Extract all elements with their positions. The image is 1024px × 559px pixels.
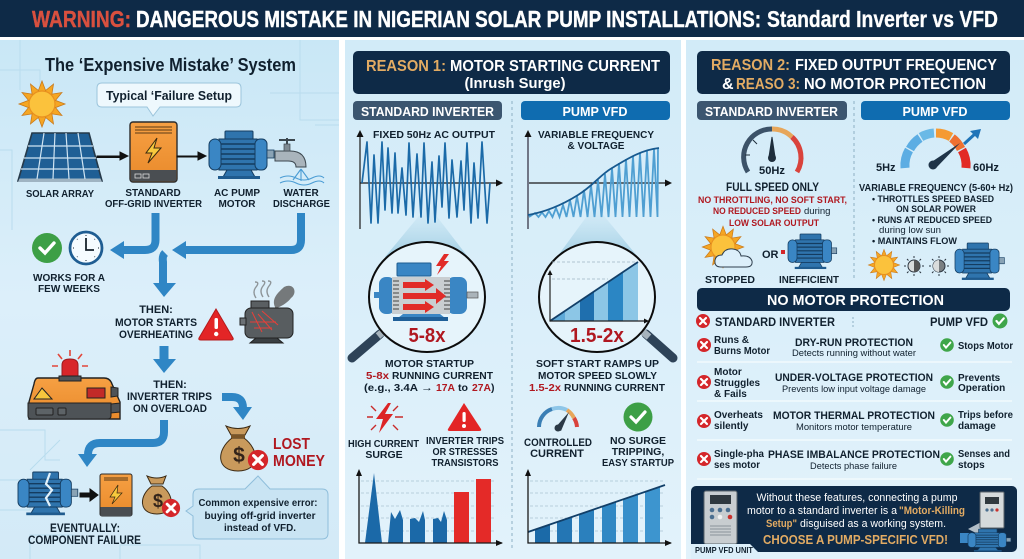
icon: clock [70, 232, 102, 264]
icon: no surge check [624, 402, 652, 432]
chart: standard inverter surge bars [356, 469, 503, 546]
label: 60Hz: 60Hz [973, 162, 999, 174]
text: full speed only: NO REDUCED SPEED [713, 206, 801, 217]
label: no surge tripping: NO SURGE [610, 435, 666, 447]
icon: red warning triangle [199, 309, 233, 340]
row: phase imbalance protection: Detects phase failure [810, 461, 897, 472]
chart: variable frequency waveform [524, 129, 672, 229]
table header: pump vfd: PUMP VFD [930, 317, 988, 329]
text: variable frequency benefits: during low sun [879, 225, 941, 236]
label: inverter trips on overload [127, 379, 212, 415]
icon: broken motor [18, 472, 78, 515]
callout: common expensive error: instead of VFD. [224, 522, 296, 534]
icon: money bag with loss mark [221, 426, 268, 471]
row: under-voltage protection [697, 367, 1005, 400]
callout: common expensive error: Common expensive error: [198, 497, 318, 509]
text: motor killing setup warning: CHOOSE A PUMP-SPECIFIC VFD! [763, 532, 948, 547]
label: no surge tripping: TRIPPING, [612, 446, 664, 458]
text: motor startup: RUNNING CURRENT [392, 370, 494, 382]
zoom cone: vfd [557, 205, 638, 257]
label: lost money: LOST [273, 436, 310, 453]
row: under-voltage protection: Struggles [714, 378, 761, 389]
chart: fixed 50Hz waveform: FIXED 50Hz AC OUTPUT [373, 129, 496, 141]
label: motor starts overheating: OVERHEATING [119, 329, 193, 341]
subheading: standard inverter [353, 101, 502, 120]
row: dry-run protection: Detects running without water [792, 348, 916, 359]
text: soft start: SOFT START RAMPS UP [536, 358, 659, 370]
icon: dimmer sun [929, 256, 949, 276]
label: inverter trips: INVERTER TRIPS [426, 435, 504, 447]
label: standard off-grid inverter: STANDARD [125, 188, 181, 199]
label: component failure: EVENTUALLY: [50, 523, 120, 535]
label: high current surge: HIGH CURRENT [348, 438, 420, 450]
icon: VFD connected to pump [960, 492, 1011, 552]
arrow: discharge to sequence [172, 213, 301, 259]
text: motor killing setup warning [747, 492, 965, 547]
icon: dim sun [904, 256, 924, 276]
table header: standard inverter: STANDARD INVERTER [715, 317, 836, 329]
text: soft start: 1.5-2x [529, 382, 561, 394]
text: variable frequency benefits: • THROTTLES SPEED BASED [872, 194, 994, 205]
no motor protection banner: NO MOTOR PROTECTION [767, 292, 944, 309]
text: full speed only: LOW SOLAR OUTPUT [729, 218, 819, 229]
title main text: DANGEROUS MISTAKE IN NIGERIAN SOLAR PUMP INSTALLATIONS: [136, 6, 761, 32]
magnifier: soft start ramp: 1.5-2x [570, 325, 624, 347]
table header: standard inverter [696, 314, 836, 329]
reason 1 banner: MOTOR STARTING CURRENT [450, 58, 660, 75]
icon: water faucet [275, 138, 324, 185]
row: dry-run protection [697, 335, 1013, 359]
text: motor startup: ) [491, 382, 494, 394]
panel: expensive mistake system [0, 40, 339, 559]
label: lost money [273, 436, 325, 470]
text: soft start: MOTOR SPEED SLOWLY [538, 370, 657, 382]
label: water discharge: WATER [283, 188, 319, 199]
subheading: standard inverter: STANDARD INVERTER [361, 105, 494, 119]
title warning word: WARNING: [32, 6, 131, 32]
text: motor startup: → [421, 382, 433, 394]
reason 1 banner: REASON 1: [366, 58, 446, 75]
row: motor thermal protection: Monitors motor temperature [796, 422, 912, 433]
icon: failed inverter [100, 474, 132, 516]
text: motor killing setup warning: disguised as a working system. [800, 518, 946, 530]
label: high current surge [348, 438, 420, 461]
label: motor starts overheating: MOTOR STARTS [115, 317, 197, 329]
panel: reason 1 motor starting current [345, 40, 681, 559]
icon: sun behind cloud [702, 226, 752, 268]
icon: VFD unit [704, 491, 737, 544]
label: works for a few weeks: FEW WEEKS [38, 283, 100, 295]
label: lost money: MONEY [273, 453, 325, 470]
label: water discharge: DISCHARGE [273, 199, 330, 210]
callout: typical failure setup: Typical ‘Failure Setup [106, 89, 232, 103]
row: motor thermal protection: silently [714, 421, 749, 432]
arrow: inverter to works for a few weeks [110, 213, 156, 259]
icon: running motor [955, 243, 1004, 280]
arrow: solar to inverter [97, 152, 128, 160]
row: motor thermal protection: MOTOR THERMAL PROTECTION [773, 410, 935, 422]
icon: bright sun [868, 249, 900, 281]
text: motor startup: MOTOR STARTUP [385, 358, 474, 370]
label: water discharge [273, 188, 330, 210]
reason 2 and 3 banner: NO MOTOR PROTECTION [804, 76, 986, 93]
header banner [0, 0, 1024, 37]
label: motor starts overheating [115, 304, 197, 341]
text: full speed only: during [804, 206, 830, 217]
subheading: pump vfd: PUMP VFD [562, 105, 628, 119]
label: AC pump motor [214, 188, 260, 210]
label: works for a few weeks: WORKS FOR A [33, 272, 105, 284]
label: motor starts overheating: THEN: [139, 304, 173, 316]
text: motor startup: 17A [436, 382, 455, 394]
text: full speed only: FULL SPEED ONLY [726, 182, 819, 194]
text: motor startup: (e.g., 3.4A [364, 382, 418, 394]
chart: variable frequency waveform: VARIABLE FREQUENCY [538, 129, 654, 141]
arrow: down to overheating [153, 253, 176, 297]
text: full speed only: NO THROTTLING, NO SOFT START, [698, 195, 847, 206]
row: phase imbalance protection: Senses and [958, 449, 1010, 460]
bottom call to action banner [691, 486, 1017, 559]
label: 5Hz: 5Hz [876, 162, 896, 174]
text: variable frequency benefits [859, 183, 1013, 247]
chart: pump vfd ramp bars [525, 469, 672, 546]
label: stopped: STOPPED [705, 274, 755, 286]
row: dry-run protection: Stops Motor [958, 341, 1013, 352]
arrow: motor to inverter failure [80, 489, 98, 501]
panel: reason 2 and 3 [686, 40, 1024, 559]
row: motor thermal protection: damage [958, 421, 996, 432]
text: full speed only [698, 182, 847, 229]
table header: pump vfd [930, 314, 1007, 329]
label: inverter trips: TRANSISTORS [432, 457, 498, 469]
label: component failure [28, 523, 141, 547]
icon: inefficient motor [781, 234, 837, 269]
text: variable frequency benefits: VARIABLE FREQUENCY (5-60+ Hz) [859, 183, 1013, 194]
label: solar array: SOLAR ARRAY [26, 189, 94, 200]
reason 2 and 3 banner: & [722, 76, 734, 93]
text: motor killing setup warning: motor to a standard inverter is a [747, 505, 898, 517]
no motor protection banner [697, 288, 1010, 311]
label: component failure: COMPONENT FAILURE [28, 535, 141, 547]
label: no surge tripping [602, 435, 674, 469]
reason 2 and 3 banner: REASO 3: [736, 76, 800, 93]
row: under-voltage protection: Prevents [958, 373, 1001, 384]
text: motor startup: 27A [472, 382, 491, 394]
icon: small money bag [142, 476, 180, 517]
icon: check mark [32, 233, 62, 263]
text: motor killing setup warning: Setup" [766, 518, 797, 530]
text: motor killing setup warning: Without these features, connecting a pump [756, 492, 958, 504]
subheading: pump vfd [521, 101, 670, 120]
row: phase imbalance protection: ses motor [714, 460, 760, 471]
subheading: standard inverter: STANDARD INVERTER [705, 105, 838, 119]
text: motor killing setup warning: "Motor-Killing [899, 505, 965, 517]
icon: tripped inverter with alarm beacon [28, 350, 120, 419]
label: controlled current: CONTROLLED [524, 437, 592, 449]
chart: variable frequency waveform: & VOLTAGE [568, 140, 624, 152]
reason 2 and 3 banner [697, 51, 1010, 94]
reason 2 and 3 banner: FIXED OUTPUT FREQUENCY [795, 57, 997, 74]
subheading: standard inverter [697, 101, 847, 120]
label: inverter trips: OR STRESSES [432, 446, 498, 458]
row: motor thermal protection [697, 410, 1013, 433]
chart: fixed 50Hz waveform [356, 129, 503, 229]
row: under-voltage protection: UNDER-VOLTAGE PROTECTION [775, 372, 933, 384]
label: controlled current: CURRENT [530, 448, 584, 460]
label: inverter trips [426, 435, 504, 469]
gauge: fixed 50Hz: 50Hz [759, 165, 785, 177]
callout: typical failure setup [97, 83, 241, 116]
icon: money bag with loss mark: $ [233, 444, 245, 467]
magnifier: motor inrush: 5-8x [408, 325, 446, 347]
icon: AC pump motor [209, 131, 274, 179]
row: phase imbalance protection: Single-pha [714, 449, 764, 460]
callout: common expensive error: buying off-grid inverter [204, 510, 316, 522]
row: under-voltage protection: Motor [714, 367, 742, 378]
arrow: inverter to motor [177, 152, 206, 160]
panel heading: The ‘Expensive Mistake’ System [45, 55, 296, 75]
label: controlled current [524, 437, 592, 460]
label: or: OR [762, 249, 779, 261]
label: inverter trips on overload: THEN: [153, 379, 187, 391]
row: phase imbalance protection [697, 449, 1010, 472]
reason 2 and 3 banner: REASON 2: [711, 57, 790, 74]
reason 1 banner [353, 51, 670, 94]
magnifier: motor inrush [352, 242, 485, 358]
icon: high current surge [367, 403, 403, 433]
label: standard off-grid inverter [105, 188, 203, 210]
gauge: fixed 50Hz [744, 129, 801, 177]
row: dry-run protection: Runs & [714, 335, 749, 346]
row: motor thermal protection: Trips before [958, 410, 1013, 421]
text: soft start [529, 358, 666, 394]
label: high current surge: SURGE [365, 449, 403, 461]
row: under-voltage protection: Prevents low input voltage damage [782, 384, 926, 395]
text: variable frequency benefits: • RUNS AT REDUCED SPEED [872, 215, 992, 226]
icon: controlled current gauge [539, 408, 577, 432]
magnifier: soft start ramp [539, 242, 673, 358]
arrow: to component failure [78, 420, 164, 467]
subheading: pump vfd [861, 101, 1010, 120]
row: phase imbalance protection: PHASE IMBALANCE PROTECTION [768, 449, 940, 461]
icon: inverter trips warning [448, 403, 481, 431]
text: variable frequency benefits: ON SOLAR POWER [896, 204, 976, 215]
label: AC pump motor: MOTOR [218, 199, 256, 210]
label: inverter trips on overload: INVERTER TRIPS [127, 391, 212, 403]
text: soft start: RUNNING CURRENT [564, 382, 666, 394]
icon: solar array [18, 133, 102, 182]
label tab: pump vfd unit [691, 544, 760, 559]
row: under-voltage protection: Operation [958, 383, 1005, 394]
icon: sun [19, 81, 65, 127]
icon: standard inverter [130, 122, 177, 182]
text: motor startup: 5-8x [366, 370, 389, 382]
label: AC pump motor: AC PUMP [214, 188, 260, 199]
subheading: pump vfd: PUMP VFD [902, 105, 968, 119]
row: motor thermal protection: Overheats [714, 410, 763, 421]
arrow: to lost money [222, 397, 252, 420]
label: inverter trips on overload: ON OVERLOAD [133, 403, 207, 415]
row: dry-run protection: DRY-RUN PROTECTION [795, 337, 913, 349]
label: works for a few weeks [33, 272, 105, 295]
icon: small money bag: $ [153, 491, 163, 511]
text: variable frequency benefits: • MAINTAINS FLOW [872, 236, 957, 247]
text: motor startup [364, 358, 494, 394]
text: motor startup: to [458, 382, 468, 394]
label: no surge tripping: EASY STARTUP [602, 457, 674, 469]
zoom cone: standard [385, 205, 468, 257]
row: phase imbalance protection: stops [958, 460, 985, 471]
label tab: pump vfd unit: PUMP VFD UNIT [695, 545, 754, 555]
reason 1 banner: (Inrush Surge) [464, 75, 566, 92]
arrow: down to inverter trips [153, 346, 176, 373]
icon: overheating motor with smoke [240, 281, 295, 343]
row: dry-run protection: Burns Motor [714, 346, 770, 357]
row: under-voltage protection: & Fails [714, 389, 747, 400]
label: standard off-grid inverter: OFF-GRID INVERTER [105, 199, 203, 210]
callout: common expensive error [186, 476, 328, 539]
label: inefficient: INEFFICIENT [779, 274, 840, 286]
gauge: variable frequency [905, 129, 981, 170]
